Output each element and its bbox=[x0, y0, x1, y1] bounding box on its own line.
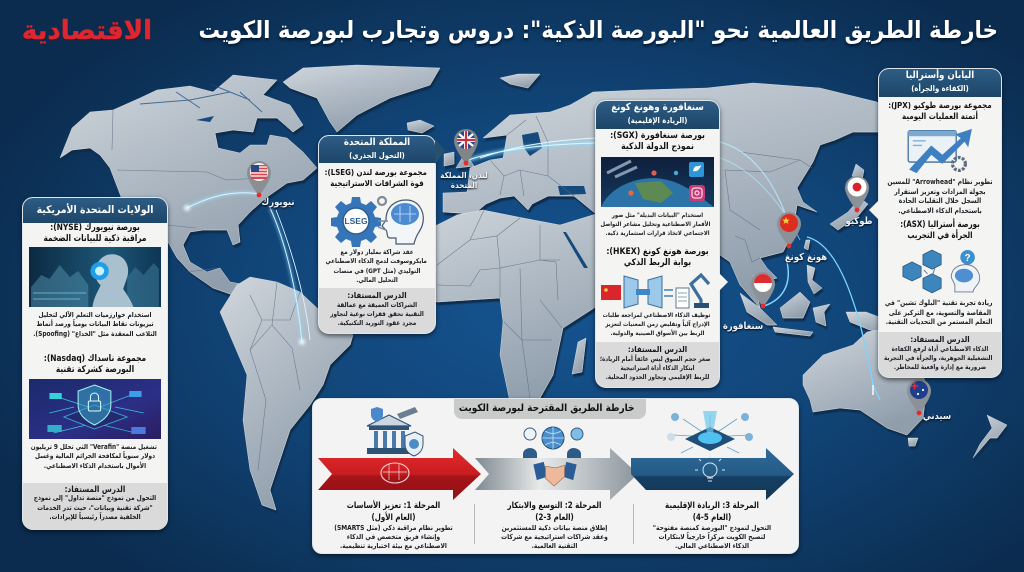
text: JPX body: السجل خلال التقلبات الحادة bbox=[899, 197, 981, 205]
new guinea bbox=[846, 312, 900, 334]
heading: HKEX bbox=[606, 247, 709, 268]
arrow: phase 3 bbox=[630, 448, 796, 502]
heading: Nasdaq: مجموعة ناسداك (Nasdaq): bbox=[44, 353, 146, 364]
text: HKEX body bbox=[603, 312, 710, 337]
south america bbox=[220, 277, 353, 510]
text: lesson: ضرورية مع إدارة واقعية للمخاطر. bbox=[894, 363, 986, 371]
heading: HKEX: بوابة الربط الذكي bbox=[624, 258, 691, 268]
svalbard bbox=[500, 74, 540, 88]
lesson learned: United States bbox=[23, 483, 167, 530]
label: London: لندن، المملكة bbox=[440, 170, 488, 180]
heading: LSEG: مجموعة بورصة لندن (LSEG): bbox=[325, 167, 427, 177]
text: SGX body: الاجتماعي لاتخاذ قرارات استثمارية ذكية. bbox=[605, 230, 710, 237]
phase 3 heading: (العام 5-4) bbox=[693, 512, 731, 522]
text: lesson: مجرد عقود التوريد التكتيكية. bbox=[338, 319, 416, 327]
new zealand bbox=[973, 415, 1007, 458]
text: ASX body: المقاصة والتسوية، مع التركيز على bbox=[889, 308, 991, 316]
pin: Hong Kong bbox=[777, 212, 801, 248]
tasmania bbox=[908, 438, 918, 446]
text: lesson: الشراكات العميقة مع عمالقة bbox=[337, 300, 417, 308]
pin: Sydney bbox=[907, 379, 931, 416]
phase 1 heading bbox=[327, 501, 460, 524]
heading: SGX: بورصة سنغافورة (SGX): bbox=[610, 131, 705, 141]
text: JPX body: باستخدام الذكاء الاصطناعي. bbox=[898, 207, 982, 215]
text: lesson: الدرس المستفاد: bbox=[65, 484, 125, 494]
heading: JPX bbox=[888, 100, 992, 121]
icon: AI chip bbox=[663, 407, 757, 459]
text: HKEX body: توظيف الذكاء الاصطناعي لمراجعة طلبات bbox=[603, 312, 710, 319]
label: London: المتحدة bbox=[451, 180, 477, 190]
text: LSEG body bbox=[326, 248, 427, 284]
java bbox=[773, 327, 813, 336]
text: lesson: الدرس المستفاد: bbox=[628, 344, 687, 354]
text: lesson bbox=[34, 484, 156, 521]
text: SGX body: استخدام "البيانات البديلة" مثل صور bbox=[612, 212, 703, 219]
panel header: United Kingdom bbox=[319, 136, 435, 163]
roadmap title: خارطة الطريق المقترحة لبورصة الكويت bbox=[459, 403, 634, 414]
icon: rising arrow dashboard bbox=[908, 128, 972, 174]
header pointer bbox=[435, 138, 445, 164]
text: phase 3 bbox=[633, 501, 791, 551]
text: Nasdaq body bbox=[31, 443, 157, 470]
text: ASX body: التعلم المستمر من التحديات التقنية. bbox=[886, 318, 992, 326]
phase 2 heading bbox=[488, 501, 621, 524]
panel header: Singapore and Hong Kong bbox=[596, 101, 719, 129]
connection arcs bbox=[187, 138, 880, 400]
text: lesson: التحول من نموذج "منصة تداول" إلى نموذج bbox=[34, 494, 156, 502]
label: Singapore: سنغافورة bbox=[723, 321, 763, 332]
panel header: Japan and Australia bbox=[879, 69, 1001, 97]
icon: network with globe bbox=[523, 426, 584, 458]
text: lesson: صغر حجم السوق ليس عائقاً أمام الريادة؛ bbox=[600, 355, 710, 363]
label: New York: نيويورك bbox=[262, 197, 294, 208]
panel: United States bbox=[22, 197, 168, 530]
text: lesson: الذكاء الاصطناعي أداة لرفع الكفاءة bbox=[892, 345, 988, 353]
phase 2 body: التقنية العالمية. bbox=[532, 542, 577, 550]
icon: blockchain cubes and brain: ? bbox=[965, 253, 971, 264]
heading: NYSE: بورصة نيويورك (NYSE): bbox=[50, 222, 140, 233]
text: lesson: "شركة تقنية وبيانات"، حيث تدر الخدمات bbox=[37, 504, 153, 512]
logo: Al Eqtisadiah: الاقتصادية bbox=[22, 16, 152, 46]
text: Nasdaq body: الأموال باستخدام الذكاء الاصطناعي. bbox=[44, 462, 146, 470]
heading: ASX: الجرأة في التجريب bbox=[907, 231, 973, 241]
phase 1 body bbox=[324, 524, 463, 552]
text: lesson: التقنية تحقق قفزات نوعية لتجاوز bbox=[330, 310, 424, 318]
text: lesson bbox=[884, 334, 992, 371]
text: LSEG body: التحليل المالي. bbox=[356, 276, 398, 284]
heading: NYSE bbox=[44, 222, 146, 244]
heading: HKEX: بورصة هونغ كونغ (HKEX): bbox=[606, 247, 709, 257]
phase 1 heading: (العام الأول) bbox=[372, 512, 415, 522]
text: LSEG body: مايكروسوفت لدمج الذكاء الاصطناعي bbox=[326, 257, 427, 265]
iceland bbox=[407, 120, 434, 133]
sumatra bbox=[740, 293, 777, 325]
africa and arabia bbox=[386, 210, 660, 402]
heading: JPX: مجموعة بورصة طوكيو (JPX): bbox=[888, 100, 992, 110]
heading: SGX bbox=[610, 131, 705, 152]
image: security shield on circuit bbox=[29, 379, 161, 439]
label: Hong Kong: هونغ كونغ bbox=[785, 252, 827, 263]
image: AI head with market charts bbox=[29, 247, 161, 307]
phase 2 heading: المرحلة 2: التوسع والابتكار bbox=[508, 501, 601, 511]
label: Sydney: سيدني bbox=[923, 411, 951, 422]
text: NYSE body: تيزيونات نقاط البيانات يومياً ورصد أنماط bbox=[36, 320, 154, 328]
north america bbox=[60, 75, 317, 295]
panel: Singapore and Hong Kong bbox=[595, 100, 720, 388]
phase 3 body: التحول لنموذج "البورصة كمنصة مفتوحة" bbox=[653, 524, 771, 532]
phase 3 body: الذكاء الاصطناعي المالي. bbox=[675, 542, 749, 550]
phase 1 body: الاصطناعي مع بيئة اختبارية تنظيمية. bbox=[340, 542, 447, 550]
phase 3 heading bbox=[647, 501, 777, 524]
text: SGX body: الأقمار الاصطناعية وتحليل مشاعر التواصل bbox=[601, 221, 710, 228]
panel header: Japan and Australia: (الكفاءة والجرأة) bbox=[911, 84, 969, 92]
panel header: United Kingdom: المملكة المتحدة bbox=[344, 137, 410, 148]
icon: bank with shield and camera bbox=[366, 407, 424, 456]
text: lesson: التشغيلية الجوهرية، والجرأة في التجربة bbox=[884, 354, 992, 362]
phase 3 body bbox=[644, 524, 780, 552]
phase 1 heading: المرحلة 1: تعزيز الأساسات bbox=[347, 501, 440, 511]
sulawesi bbox=[813, 304, 830, 326]
britain and ireland bbox=[456, 142, 474, 168]
panel pointer bbox=[869, 200, 879, 220]
text: lesson bbox=[600, 344, 710, 381]
icon: handshake bbox=[533, 462, 577, 486]
icon: blockchain cubes and brain bbox=[902, 250, 980, 294]
phase 2 heading: (العام 3-2) bbox=[535, 512, 574, 522]
text: phase 1 bbox=[313, 501, 474, 551]
phase 2 body: وعقد شراكات استراتيجية مع شركات bbox=[501, 533, 608, 541]
text: lesson: الخلفية مصدراً رئيسياً للإيرادات. bbox=[49, 513, 141, 521]
panel header: Japan and Australia: اليابان وأستراليا bbox=[906, 70, 974, 81]
icon: LSEG gear and brain: LSEG bbox=[344, 216, 368, 226]
phase 2 body bbox=[485, 524, 624, 552]
pin: London bbox=[454, 129, 478, 166]
borneo bbox=[780, 292, 810, 318]
text: HKEX body: الربط بين الأسواق الصينية والدولية. bbox=[611, 330, 704, 337]
phase 3 body: لتصبح الكويت مركزاً خارجياً لابتكارات bbox=[659, 533, 765, 541]
arrow: phase 1 bbox=[318, 448, 481, 500]
text: lesson: ابتكار الذكاء أداة استراتيجية bbox=[620, 364, 695, 372]
heading: Nasdaq bbox=[44, 353, 146, 375]
text: JPX body bbox=[887, 178, 992, 215]
text: Nasdaq body: تشغيل منصة "Verafin" التي تحلل 9 تريليون bbox=[31, 443, 157, 451]
heading: LSEG: قوة الشراقات الاستراتيجية bbox=[330, 178, 424, 188]
text: lesson bbox=[330, 290, 424, 327]
heading: ASX bbox=[900, 218, 980, 241]
roadmap title bbox=[454, 399, 646, 419]
arrow: phase 2 bbox=[475, 448, 634, 500]
text: SGX body bbox=[600, 212, 710, 237]
panel header: Singapore and Hong Kong: (الريادة الإقليمية) bbox=[628, 116, 687, 124]
text: Nasdaq body: دولار سنوياً لمكافحة الجرائم المالية وغسل bbox=[35, 452, 155, 460]
image: satellite above earth bbox=[601, 157, 714, 207]
heading: ASX: بورصة أستراليا (ASX): bbox=[900, 220, 980, 230]
text: phase 2 bbox=[474, 501, 635, 551]
panel header: Singapore and Hong Kong: سنغافورة وهونغ كونغ bbox=[611, 102, 704, 113]
heading: SGX: نموذج الدولة الذكية bbox=[621, 142, 694, 152]
seas cut into the land bbox=[196, 116, 588, 268]
phase 1 body: تطوير نظام مراقبة ذكي (مثل SMARTS) bbox=[334, 524, 453, 532]
lesson learned: Japan and Australia bbox=[879, 332, 1001, 377]
lesson learned: Singapore and Hong Kong bbox=[596, 342, 719, 387]
panel: United Kingdom bbox=[318, 135, 436, 334]
pin: New York bbox=[247, 161, 271, 198]
greenland bbox=[283, 65, 440, 132]
phase 1 body: وإنشاء فريق متخصص في الذكاء bbox=[347, 533, 440, 541]
pin: Tokyo bbox=[845, 176, 869, 212]
heading: Nasdaq: البورصة كشركة تقنية bbox=[56, 364, 134, 375]
text: LSEG body: عقد شراكة بمليار دولار مع bbox=[340, 248, 414, 256]
madagascar bbox=[572, 338, 586, 374]
panel header: United States: الولايات المتحدة الأمريكية bbox=[37, 204, 153, 216]
text: ASX body bbox=[885, 299, 992, 326]
philippines bbox=[807, 265, 822, 294]
label: Tokyo: طوكيو bbox=[846, 216, 872, 227]
title: خارطة الطريق العالمية نحو "البورصة الذكية": دروس وتجارب لبورصة الكويت bbox=[198, 16, 998, 44]
icon: LSEG gear and brain bbox=[331, 196, 424, 247]
label: London bbox=[440, 170, 488, 190]
panel: Kuwait roadmap bbox=[312, 398, 799, 554]
text: ASX body: ريادة تجربة تقنية "البلوك تشين" في bbox=[885, 299, 992, 307]
taiwan bbox=[804, 240, 810, 250]
panel header: United States bbox=[23, 198, 167, 223]
panel header: United Kingdom: (التحول الجذري) bbox=[349, 150, 405, 160]
icon: China flag, gateway, documents and robot arm bbox=[601, 272, 710, 309]
australia bbox=[803, 330, 927, 435]
phase 2 body: إطلاق منصة بيانات ذكية للمستثمرين bbox=[502, 524, 607, 532]
text: JPX body: بجولة المزادات وتعزيز استقرار bbox=[894, 188, 986, 196]
text: HKEX body: الإدراج آلياً وتقليص زمن المعنيات لتعزيز bbox=[605, 321, 710, 328]
text: JPX body: تطوير نظام "Arrowhead" للمسين bbox=[887, 178, 992, 186]
text: NYSE body: استخدام خوارزميات التعلم الآلي لتحليل bbox=[39, 311, 151, 319]
pin: Singapore bbox=[751, 272, 775, 308]
country borders bbox=[112, 110, 812, 470]
japan bbox=[852, 164, 864, 180]
panel pointer bbox=[719, 273, 728, 291]
text: LSEG body: التوليدي (مثل GPT) في منصات bbox=[334, 267, 420, 275]
lesson learned: United Kingdom bbox=[319, 288, 435, 333]
panel: Japan and Australia bbox=[878, 68, 1002, 378]
heading: LSEG bbox=[325, 167, 427, 188]
heading: NYSE: مراقبة ذكية للبيانات الضخمة bbox=[44, 233, 146, 244]
text: lesson: للربط الإقليمي وتجاوز الحدود المحلية. bbox=[606, 373, 709, 381]
text: lesson: الدرس المستفاد: bbox=[347, 290, 407, 300]
text: NYSE body: التلاعب المعقدة مثل "الخداع" (Spoofing). bbox=[33, 330, 157, 338]
eurasia bbox=[443, 83, 892, 308]
phase 3 heading: المرحلة 3: الريادة الإقليمية bbox=[665, 501, 759, 511]
text: lesson: الدرس المستفاد: bbox=[910, 334, 970, 344]
heading: JPX: أتمتة العمليات اليومية bbox=[902, 111, 978, 121]
text: NYSE body bbox=[33, 311, 157, 338]
